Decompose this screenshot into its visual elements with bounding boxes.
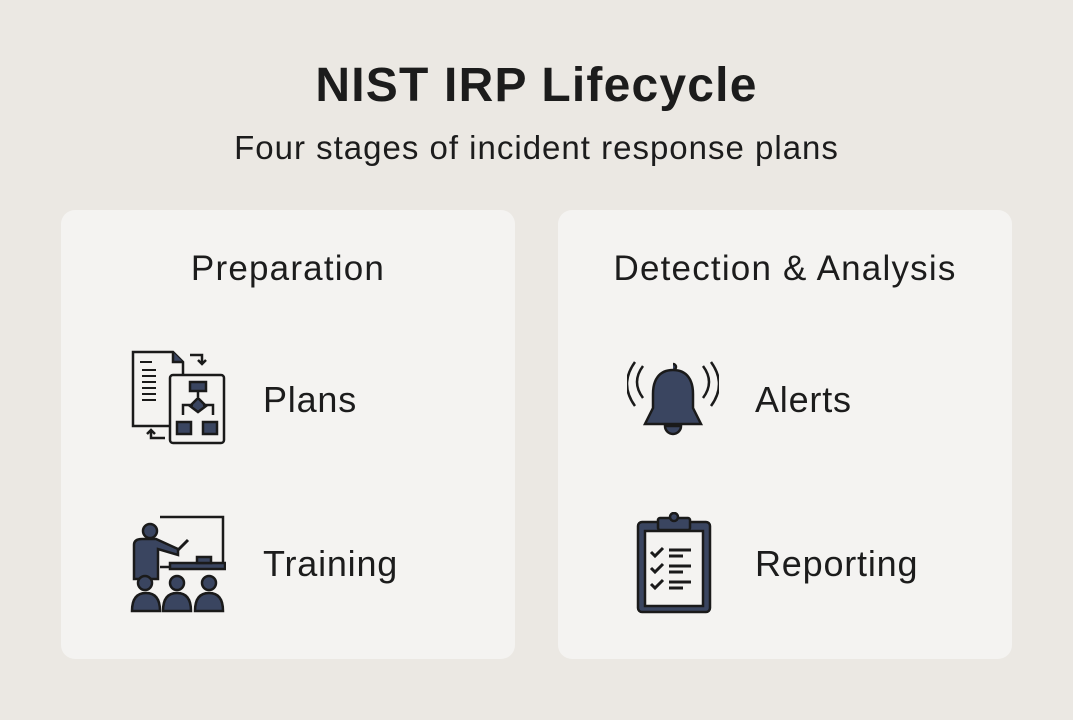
label: alerts: Alerts (755, 379, 852, 420)
label: plans: Plans (263, 379, 357, 420)
heading: preparation: Preparation (191, 249, 385, 288)
panel: preparation (61, 210, 515, 659)
icon: training (130, 516, 226, 612)
icon: bell (627, 361, 719, 436)
title: NIST IRP Lifecycle (315, 59, 758, 112)
icon: plans (132, 350, 226, 444)
heading: detection & analysis: Detection & Analysis (613, 249, 957, 288)
subtitle: Four stages of incident response plans (234, 129, 839, 166)
icon: clipboard (636, 512, 712, 614)
label: reporting: Reporting (755, 543, 918, 584)
label: training: Training (263, 543, 398, 584)
panel: detection & analysis (558, 210, 1012, 659)
